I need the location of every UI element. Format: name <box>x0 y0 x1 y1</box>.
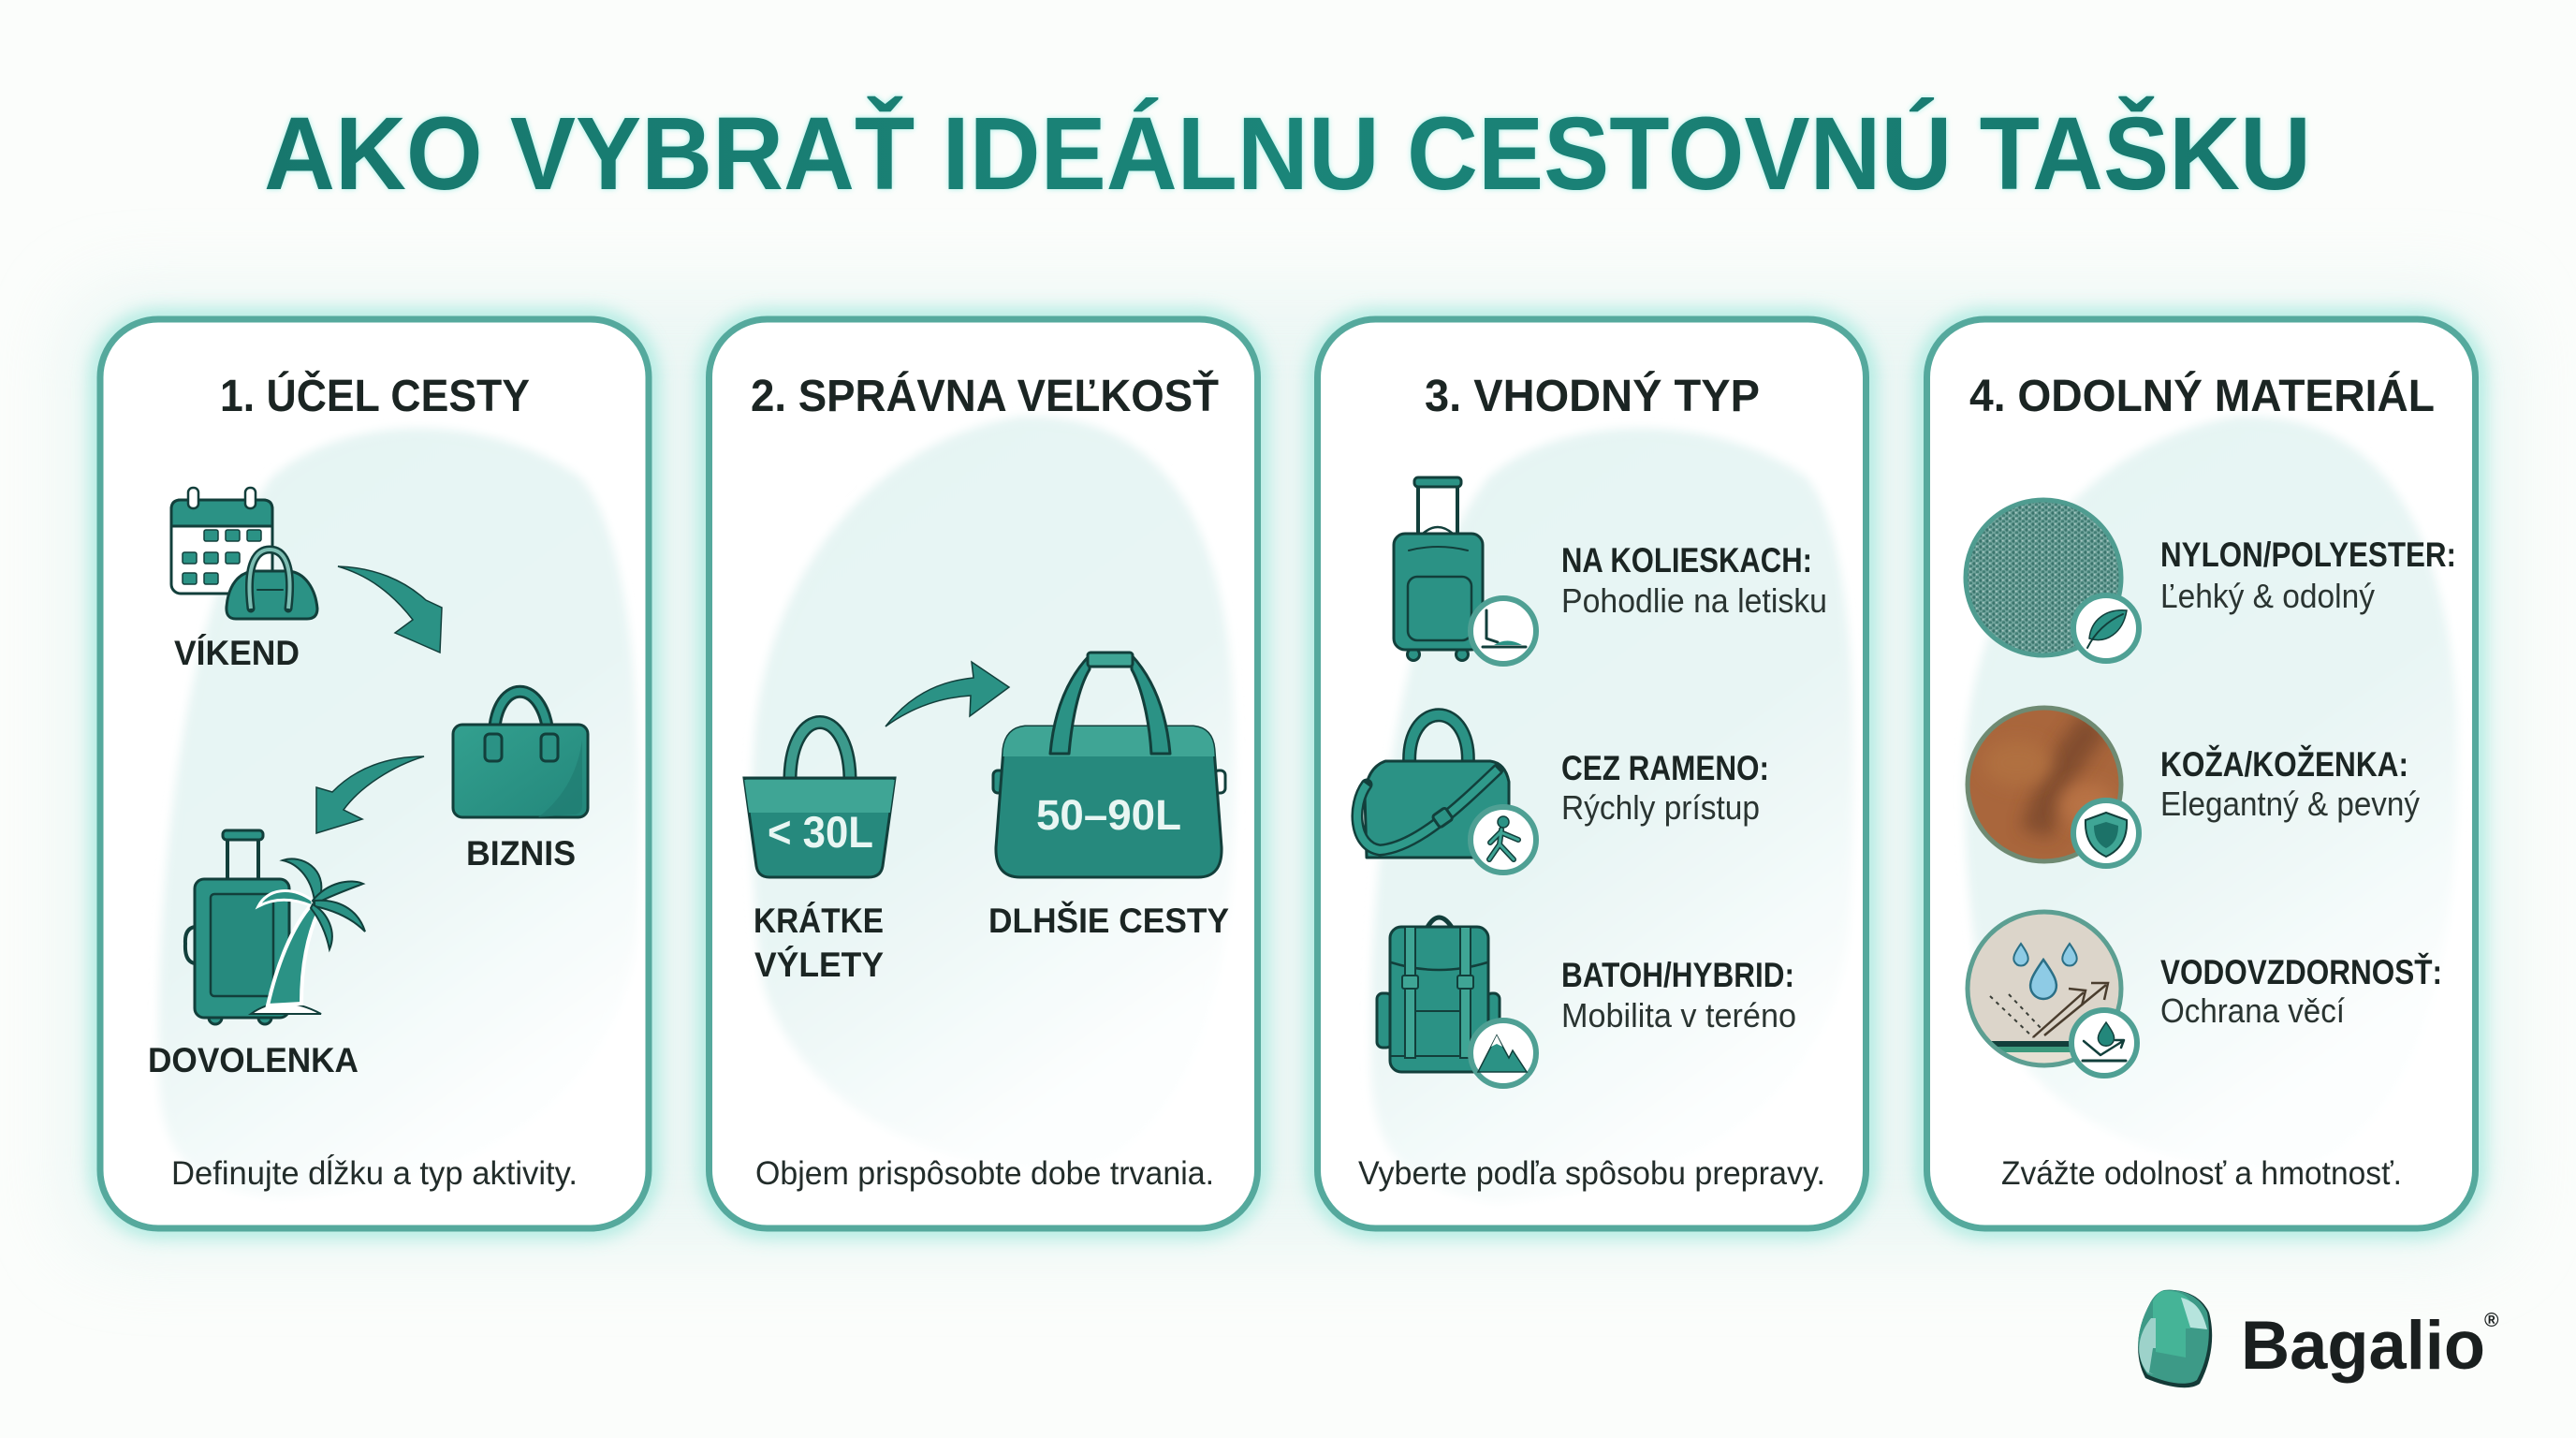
label: krátke výlety: KRÁTKE <box>754 902 884 940</box>
label: krátke výlety: VÝLETY <box>754 946 884 984</box>
text: koža koženka: KOŽA/KOŽENKA: <box>2160 744 2408 784</box>
badge: shield <box>2073 800 2139 866</box>
icon: water resistant swatch <box>1966 912 2137 1080</box>
caption: Vyberte podľa spôsobu prepravy. <box>1358 1155 1825 1192</box>
text: cez rameno: CEZ RAMENO: <box>1561 749 1769 787</box>
text: batoh hybrid <box>1561 956 1796 1034</box>
label: krátke výlety <box>754 902 884 984</box>
arrow: biznis to dovolenka <box>316 756 424 833</box>
text: na kolieskach: Pohodlie na letisku <box>1561 581 1827 620</box>
text: koža koženka: Elegantný & pevný <box>2160 785 2420 823</box>
badge: walker <box>1471 807 1536 873</box>
caption: Zvážte odolnosť a hmotnosť. <box>2001 1155 2402 1192</box>
text: batoh hybrid: Mobilita v teréno <box>1561 996 1796 1034</box>
panel: odolný materiál <box>1926 319 2475 1228</box>
icon: nylon fabric swatch <box>1966 500 2139 661</box>
badge: airport <box>1471 598 1536 664</box>
text: na kolieskach <box>1561 541 1827 620</box>
heading: 3. VHODNÝ TYP <box>1425 371 1760 421</box>
label: biznis: BIZNIS <box>466 834 576 873</box>
title: AKO VYBRAŤ IDEÁLNU CESTOVNÚ TAŠKU <box>264 96 2311 212</box>
heading: 2. SPRÁVNA VEĽKOSŤ <box>751 370 1219 421</box>
icon: business bag <box>453 692 588 817</box>
wordmark: Bagalio <box>2241 1308 2485 1384</box>
registered mark: ® <box>2484 1310 2499 1331</box>
icon: suitcase with palm <box>185 830 365 1024</box>
text: batoh hybrid: BATOH/HYBRID: <box>1561 956 1794 994</box>
panel: účel cesty <box>100 319 649 1228</box>
panel: vhodný typ <box>1318 319 1866 1228</box>
icon: wheeled suitcase <box>1394 477 1536 664</box>
label: dlhšie cesty: DLHŠIE CESTY <box>988 901 1229 940</box>
icon: backpack <box>1377 917 1536 1086</box>
text: koža koženka <box>2160 744 2420 823</box>
badge: feather <box>2073 595 2139 661</box>
text: nylon polyester: NYLON/POLYESTER: <box>2160 536 2456 574</box>
icon: leather swatch <box>1968 708 2139 866</box>
caption: Definujte dĺžku a typ aktivity. <box>171 1154 578 1192</box>
icon: large duffel with volume <box>992 653 1226 877</box>
text: vodovzdornosť: Ochrana věcí <box>2160 991 2345 1030</box>
text: na kolieskach: NA KOLIESKACH: <box>1561 541 1812 580</box>
icon: calendar with duffel <box>171 488 317 619</box>
arrow: small to large <box>886 662 1009 726</box>
text: volume 50–90 l: 50–90L <box>1036 791 1181 839</box>
text: cez rameno <box>1561 749 1769 827</box>
badge: water repellent <box>2071 1010 2137 1076</box>
caption: Objem prispôsobte dobe trvania. <box>755 1155 1214 1192</box>
heading: 1. ÚČEL CESTY <box>220 370 530 421</box>
logo: Bagalio <box>2138 1290 2499 1387</box>
panel: správna veľkosť <box>710 319 1258 1228</box>
label: víkend: VÍKEND <box>174 634 300 672</box>
text: nylon polyester: Ľehký & odolný <box>2160 577 2375 615</box>
icon: shoulder bag <box>1357 715 1536 873</box>
badge: mountains <box>1471 1020 1536 1086</box>
label: dovolenka: DOVOLENKA <box>148 1041 359 1079</box>
text: vodovzdornosť <box>2160 952 2442 1030</box>
text: cez rameno: Rýchly prístup <box>1561 788 1760 827</box>
icon: logo gem <box>2138 1290 2212 1387</box>
arrow: víkend to biznis <box>338 566 442 653</box>
text: vodovzdornosť: VODOVZDORNOSŤ: <box>2160 952 2442 991</box>
icon: small tote with volume <box>744 723 895 877</box>
heading: 4. ODOLNÝ MATERIÁL <box>1969 371 2435 421</box>
text: nylon polyester <box>2160 536 2456 615</box>
title: AKO VYBRAŤ IDEÁLNU CESTOVNÚ TAŠKU <box>264 96 2311 212</box>
text: volume under 30 l: < 30L <box>768 807 873 857</box>
